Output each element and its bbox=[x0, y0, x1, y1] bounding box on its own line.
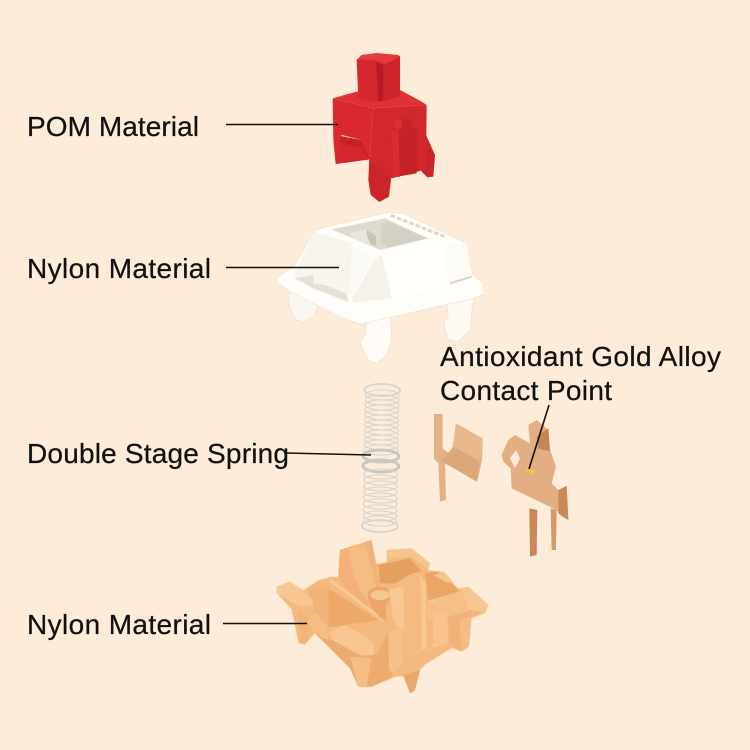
housing left clip bbox=[288, 292, 318, 323]
housing left face bbox=[293, 232, 352, 297]
label: Antioxidant Gold Alloy Contact Point: Contact Point bbox=[440, 375, 612, 406]
gold contact point bbox=[526, 468, 535, 474]
stem right face bbox=[370, 105, 427, 178]
base left cavity bbox=[328, 588, 378, 627]
housing right face bbox=[443, 243, 472, 285]
housing front clip bbox=[360, 316, 392, 363]
label: Antioxidant Gold Alloy Contact Point: Antioxidant Gold Alloy bbox=[440, 341, 721, 372]
base rear tower bbox=[338, 540, 380, 610]
spring post bbox=[368, 598, 387, 621]
housing pillar bbox=[350, 245, 372, 300]
housing right notch bbox=[450, 277, 472, 283]
spring bbox=[362, 384, 400, 532]
stem left opening bbox=[336, 136, 370, 164]
housing floor bbox=[295, 275, 348, 302]
base front tower bbox=[388, 575, 427, 662]
base centre rib bbox=[388, 628, 403, 673]
red POM stem bbox=[333, 53, 435, 202]
contact pin short bbox=[551, 508, 557, 550]
housing top window bbox=[332, 218, 428, 250]
contact pin long bbox=[529, 508, 537, 557]
base front left tab bbox=[330, 625, 375, 655]
base cavity rim bbox=[330, 580, 383, 620]
label: POM Material: POM Material bbox=[27, 111, 199, 142]
base bottom spike bbox=[403, 670, 420, 693]
left contact plate bbox=[434, 414, 483, 502]
base left tab bbox=[277, 582, 313, 607]
white nylon top housing bbox=[277, 213, 484, 363]
right contact plate bbox=[502, 420, 568, 557]
stem left face bbox=[333, 98, 373, 164]
orange nylon base housing bbox=[277, 540, 488, 693]
stem top face bbox=[333, 90, 427, 108]
label: Double Stage Spring: Double Stage Spring bbox=[27, 438, 289, 469]
base front leg bbox=[350, 657, 372, 687]
base rear cavity bbox=[378, 558, 422, 583]
base top right tab bbox=[387, 548, 430, 570]
stem bottom nub bbox=[368, 157, 392, 202]
base right rib bbox=[428, 610, 448, 649]
base big right tab area bbox=[425, 590, 488, 620]
stem cross post bbox=[357, 53, 400, 102]
stem side rib bbox=[392, 118, 417, 177]
housing front face bbox=[385, 243, 448, 298]
base silhouette bbox=[277, 540, 488, 693]
label: Nylon Material bottom: Nylon Material bbox=[27, 609, 211, 640]
housing top text marks bbox=[391, 215, 445, 237]
base right cavity bbox=[425, 572, 460, 600]
housing outer shell bbox=[277, 213, 484, 324]
base cavity right rim bbox=[428, 593, 460, 603]
stem tail bbox=[422, 135, 435, 177]
base front left wall bbox=[315, 630, 392, 687]
label: Antioxidant Gold Alloy Contact Point bbox=[440, 341, 721, 469]
base clip bbox=[308, 613, 328, 640]
base right wall bbox=[448, 610, 472, 652]
housing right clip bbox=[443, 296, 474, 342]
label: Nylon Material top: Nylon Material bbox=[27, 253, 211, 284]
